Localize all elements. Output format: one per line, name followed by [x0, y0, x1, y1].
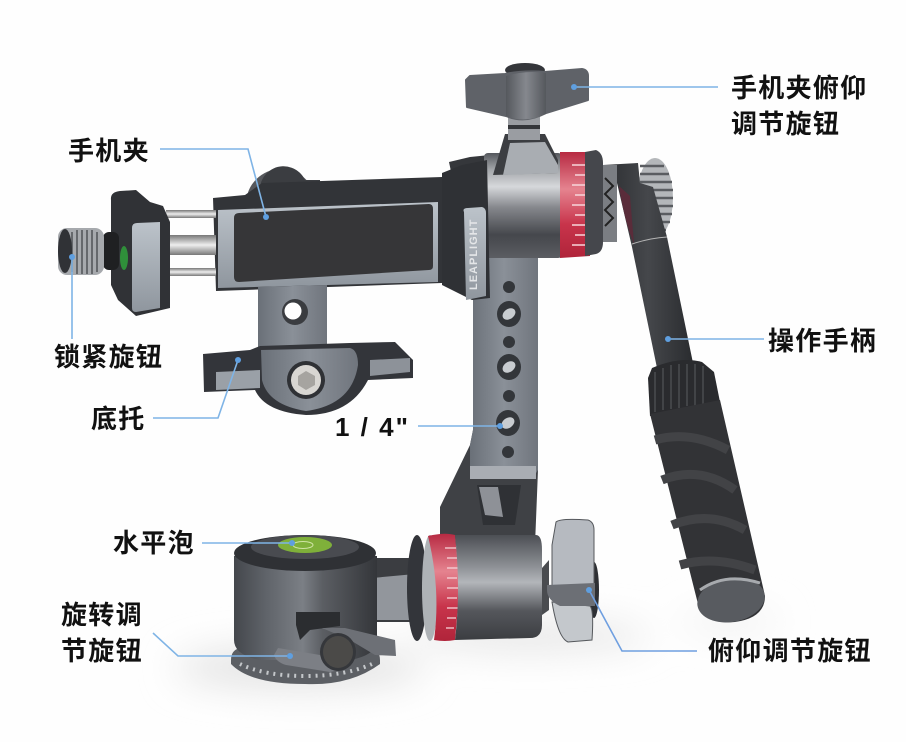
clamp rods and screw	[166, 210, 216, 276]
vertical plate	[440, 258, 538, 545]
product: gimbal head	[58, 63, 768, 684]
callout: operating handle: 操作手柄	[768, 326, 877, 356]
callout: locking knob: 锁紧旋钮	[54, 342, 163, 372]
callout: bubble level	[113, 528, 295, 558]
locking lever	[274, 628, 396, 672]
rotating base	[231, 535, 396, 684]
lower pivot cylinder	[370, 534, 549, 641]
sliding jaw	[103, 190, 170, 316]
lower pitch wing knob	[547, 519, 599, 642]
callout: quarter-inch hole: 1 / 4"	[335, 412, 410, 442]
floor shadow	[175, 612, 780, 690]
callout: operating handle	[665, 326, 877, 356]
locking knob	[58, 228, 104, 275]
callout: phone clamp pitch knob	[571, 73, 868, 139]
brand text: LEAPLIGHT	[468, 219, 480, 290]
callout: phone clamp	[68, 136, 269, 220]
callout: pitch adjust knob	[586, 587, 872, 666]
callout: bubble level: 水平泡	[113, 528, 195, 558]
callout: phone clamp: 手机夹	[68, 136, 150, 166]
mounting holes	[496, 281, 521, 458]
callout: bottom support: 底托	[91, 404, 146, 434]
callout: pitch adjust knob: 俯仰调节旋钮	[708, 636, 872, 666]
upper pivot cylinder	[449, 134, 617, 262]
callout: locking knob	[54, 254, 163, 372]
phone clamp body	[213, 160, 490, 300]
callout: quarter-inch hole	[335, 412, 503, 442]
callout: rotation knob: 旋转调	[61, 600, 143, 630]
operating handle	[603, 163, 768, 628]
upper pitch wing knob	[466, 63, 588, 140]
handle knurled knob	[637, 158, 673, 238]
callout: rotation knob	[61, 600, 293, 666]
bottom support bracket	[203, 285, 413, 415]
callout: phone clamp pitch knob: 手机夹俯仰	[731, 73, 868, 103]
callout: rotation knob: 节旋钮	[61, 636, 143, 666]
callout: bottom support	[91, 357, 241, 434]
callout: phone clamp pitch knob: 调节旋钮	[731, 109, 840, 139]
